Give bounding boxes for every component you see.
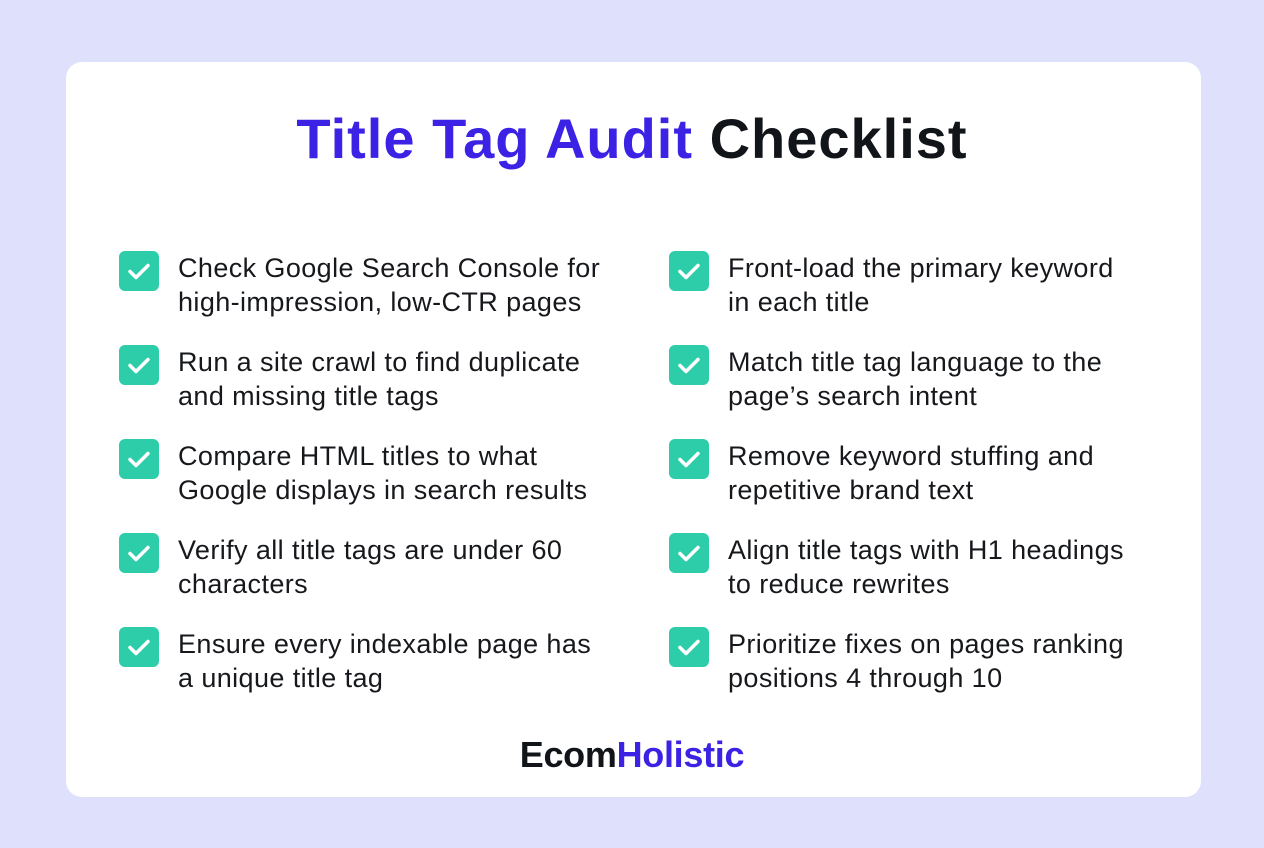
item: left 4: characters xyxy=(178,568,308,598)
logo: EcomHolistic xyxy=(520,734,744,775)
item: right 3: repetitive brand text xyxy=(728,474,974,504)
item: left 4 xyxy=(119,533,562,598)
item: left 4: Verify all title tags are under 60 xyxy=(178,535,562,565)
card panel xyxy=(66,62,1201,797)
item: left 1: Check Google Search Console for xyxy=(178,253,600,283)
item: left 1 xyxy=(119,251,600,316)
item: right 4 xyxy=(669,533,1124,598)
item: left 5: a unique title tag xyxy=(178,662,383,692)
item: left 2: and missing title tags xyxy=(178,380,439,410)
item: right 1: Front-load the primary keyword xyxy=(728,253,1114,283)
item: left 3 xyxy=(119,439,587,504)
item: right 2 xyxy=(669,345,1102,410)
item: right 3: Remove keyword stuffing and xyxy=(728,441,1094,471)
item: right 5 xyxy=(669,627,1124,692)
item: left 3: Compare HTML titles to what xyxy=(178,441,537,471)
item: right 4: to reduce rewrites xyxy=(728,568,950,598)
item: right 1: in each title xyxy=(728,286,870,316)
item: left 1: high-impression, low-CTR pages xyxy=(178,286,582,316)
item: right 2: page’s search intent xyxy=(728,380,977,410)
item: left 5: Ensure every indexable page has xyxy=(178,629,591,659)
item: right 5: positions 4 through 10 xyxy=(728,662,1002,692)
item: right 1 xyxy=(669,251,1114,316)
item: left 5 xyxy=(119,627,591,692)
item: left 2 xyxy=(119,345,580,410)
item: right 3 xyxy=(669,439,1094,504)
item: right 4: Align title tags with H1 headings xyxy=(728,535,1124,565)
item: left 2: Run a site crawl to find duplicate xyxy=(178,347,580,377)
item: left 3: Google displays in search results xyxy=(178,474,587,504)
title: Title Tag Audit Checklist xyxy=(296,107,968,170)
item: right 5: Prioritize fixes on pages ranking xyxy=(728,629,1124,659)
item: right 2: Match title tag language to the xyxy=(728,347,1102,377)
